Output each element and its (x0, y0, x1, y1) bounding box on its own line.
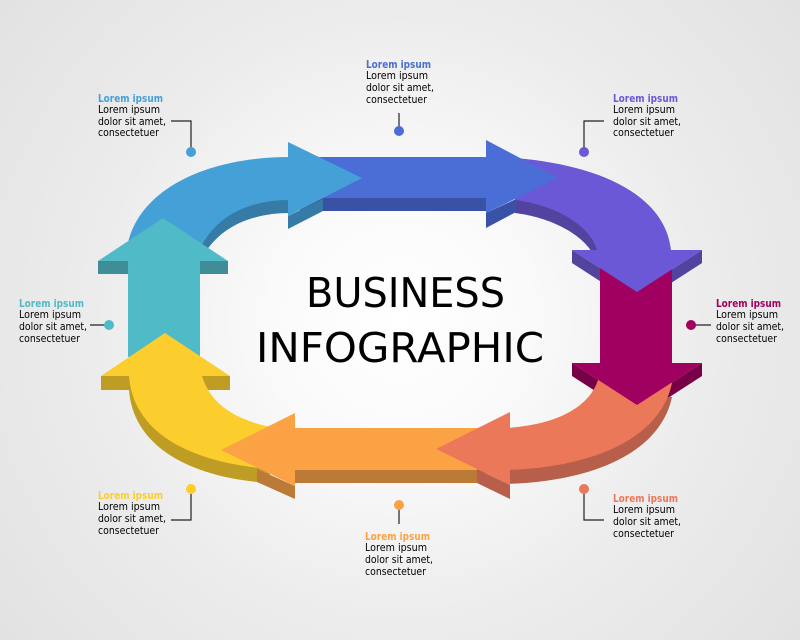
label: teal left: Lorem ipsum (19, 309, 81, 321)
label: coral bottom right: Lorem ipsum (613, 493, 678, 505)
label: yellow bottom left: dolor sit amet, (98, 513, 166, 525)
label: coral bottom right: dolor sit amet, (613, 516, 681, 528)
arrow: orange pointing left (221, 413, 485, 499)
arrow: yellow curved bottom left (101, 333, 270, 482)
title: BUSINESS (306, 269, 505, 317)
label: maroon right (686, 298, 784, 345)
label: blue top: Lorem ipsum (366, 70, 428, 82)
label: yellow bottom left: Lorem ipsum (98, 490, 163, 502)
label: blue top: Lorem ipsum (366, 59, 431, 71)
label: maroon right: consectetuer (716, 333, 778, 345)
label: orange bottom: Lorem ipsum (365, 531, 430, 543)
label: blue top (366, 59, 434, 136)
label: sky blue top left: dolor sit amet, (98, 116, 166, 128)
title: INFOGRAPHIC (256, 324, 544, 372)
label: orange bottom: consectetuer (365, 566, 427, 578)
label: sky blue top left: Lorem ipsum (98, 93, 163, 105)
arrow wings shadow: maroon (572, 363, 702, 418)
label: orange bottom (365, 500, 433, 578)
label: maroon right: Lorem ipsum (716, 298, 781, 310)
label: yellow bottom left: Lorem ipsum (98, 501, 160, 513)
label: teal left (19, 298, 114, 345)
label: purple top right: consectetuer (613, 127, 675, 139)
arrow wings shadow and inner wall: purple (515, 171, 702, 305)
label: purple top right (579, 93, 681, 157)
label: sky blue top left (98, 93, 196, 157)
arrow: coral curved bottom right (436, 360, 672, 499)
label: yellow bottom left: consectetuer (98, 525, 160, 537)
label: purple top right: Lorem ipsum (613, 93, 678, 105)
label: orange bottom: dolor sit amet, (365, 554, 433, 566)
label: teal left: dolor sit amet, (19, 321, 87, 333)
label: blue top: dolor sit amet, (366, 82, 434, 94)
label: coral bottom right (579, 484, 681, 540)
arrow: blue pointing right (300, 140, 558, 228)
arrow: maroon pointing down (572, 262, 702, 405)
arrow body: sky blue curved top left (128, 157, 290, 258)
label: sky blue top left: consectetuer (98, 127, 160, 139)
label: orange bottom: Lorem ipsum (365, 542, 427, 554)
label: yellow bottom left (98, 484, 196, 537)
arrow: teal pointing up (98, 218, 228, 357)
arrow head: sky blue (288, 142, 362, 229)
label: maroon right: Lorem ipsum (716, 309, 778, 321)
label: purple top right: dolor sit amet, (613, 116, 681, 128)
label: teal left: consectetuer (19, 333, 81, 345)
label: purple top right: Lorem ipsum (613, 104, 675, 116)
label: blue top: consectetuer (366, 94, 428, 106)
title (256, 269, 544, 372)
label: coral bottom right: consectetuer (613, 528, 675, 540)
label: maroon right: dolor sit amet, (716, 321, 784, 333)
label: sky blue top left: Lorem ipsum (98, 104, 160, 116)
label: coral bottom right: Lorem ipsum (613, 504, 675, 516)
arrow top: purple curved top right (515, 158, 702, 292)
label: teal left: Lorem ipsum (19, 298, 84, 310)
